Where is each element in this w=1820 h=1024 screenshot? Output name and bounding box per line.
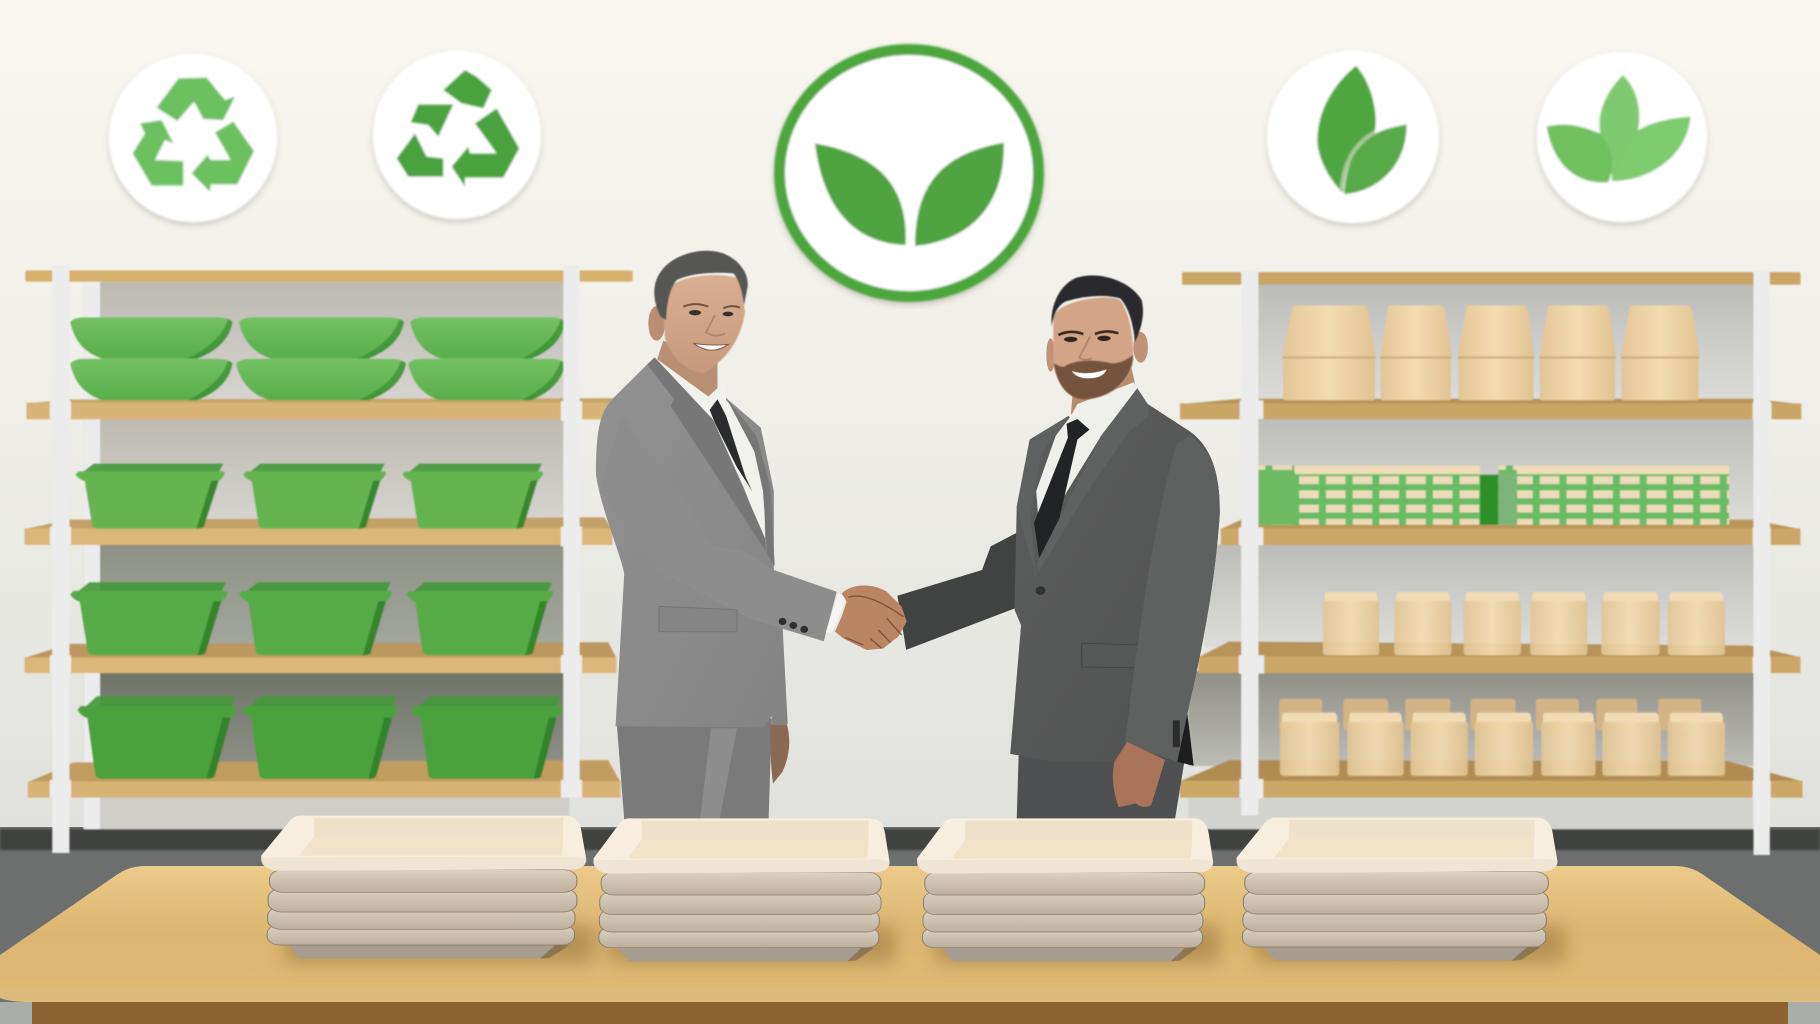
right man jacket (1010, 404, 1220, 762)
table top (0, 866, 1820, 990)
table apron (32, 1001, 1788, 1024)
badge: recycling dark green (373, 51, 541, 219)
table front edge (0, 988, 1820, 1002)
tray stack 1 (261, 816, 586, 959)
right man far arm (897, 531, 1021, 650)
right man cuff buttons (1173, 720, 1180, 747)
clasped hands (826, 585, 907, 650)
left man cuff buttons (779, 618, 808, 633)
left man tie (710, 399, 752, 491)
left man sleeve (600, 416, 837, 641)
right man trousers (1017, 748, 1185, 819)
left man lower hand (770, 724, 789, 784)
green tubs row three (78, 696, 562, 779)
back post left (84, 282, 100, 829)
badge: recycling light green (109, 54, 277, 222)
kraft boxes back row (1279, 699, 1701, 730)
left man trousers (617, 718, 772, 819)
right man back vent (1177, 701, 1194, 766)
left man facial features (683, 304, 740, 350)
green striped packs (1258, 465, 1729, 525)
right man head (1046, 275, 1148, 399)
shelf backing left (84, 282, 569, 829)
kraft boxes front row (1280, 713, 1725, 776)
stacks of fibre trays on the table (261, 816, 1557, 961)
kraft cups (1282, 305, 1699, 400)
left man ear (648, 306, 665, 341)
right shelving unit with kraft containers (1180, 270, 1803, 855)
table (0, 866, 1820, 1024)
right man face (1053, 297, 1133, 399)
two businessmen shaking hands (596, 341, 1220, 819)
man on the left (596, 341, 837, 819)
right man sleeve shading (1125, 436, 1220, 762)
green tubs row two (70, 582, 553, 655)
right man hair (1051, 275, 1143, 342)
handshake (835, 585, 907, 650)
left man head (648, 251, 748, 373)
right man tie (1034, 419, 1090, 559)
left shelving unit with green containers (24, 266, 633, 853)
floor (0, 827, 1820, 1024)
badge: central leaf logo (780, 50, 1038, 296)
tray stack 4 (1237, 818, 1557, 961)
left man face (663, 275, 745, 373)
right man lower hand (1113, 742, 1165, 807)
right man shirt (1036, 382, 1137, 546)
shelf planks left (24, 271, 633, 798)
left man pocket (659, 606, 737, 632)
left man hair (654, 251, 748, 320)
eco badges on the wall (109, 50, 1707, 296)
green bowls (70, 317, 565, 400)
left man lapels (647, 357, 775, 566)
shelf planks right (1180, 272, 1803, 798)
green tubs row one (76, 464, 543, 529)
front posts left (50, 266, 582, 853)
tray shadows (285, 925, 1565, 963)
badge: two leaves (1267, 51, 1439, 223)
right man facial features (1058, 331, 1118, 378)
finger lines (845, 596, 903, 648)
right man lapels (1017, 388, 1149, 578)
right man pocket (1082, 643, 1146, 668)
tray stack 3 (917, 818, 1213, 961)
left man shirt cuff (826, 593, 846, 634)
left man shirt (655, 357, 765, 542)
right man button (1036, 586, 1045, 595)
front posts right (1239, 270, 1771, 855)
right man beard (1054, 355, 1133, 399)
tray stack 2 (593, 818, 890, 961)
right man neck (1071, 368, 1136, 428)
shelf backing right (1188, 284, 1760, 829)
badge: three leaves (1537, 52, 1707, 222)
left man jacket (596, 364, 788, 727)
left man neck (657, 341, 717, 404)
man on the right (897, 368, 1220, 819)
right man ears (1046, 332, 1148, 372)
kraft jars (1323, 592, 1725, 655)
